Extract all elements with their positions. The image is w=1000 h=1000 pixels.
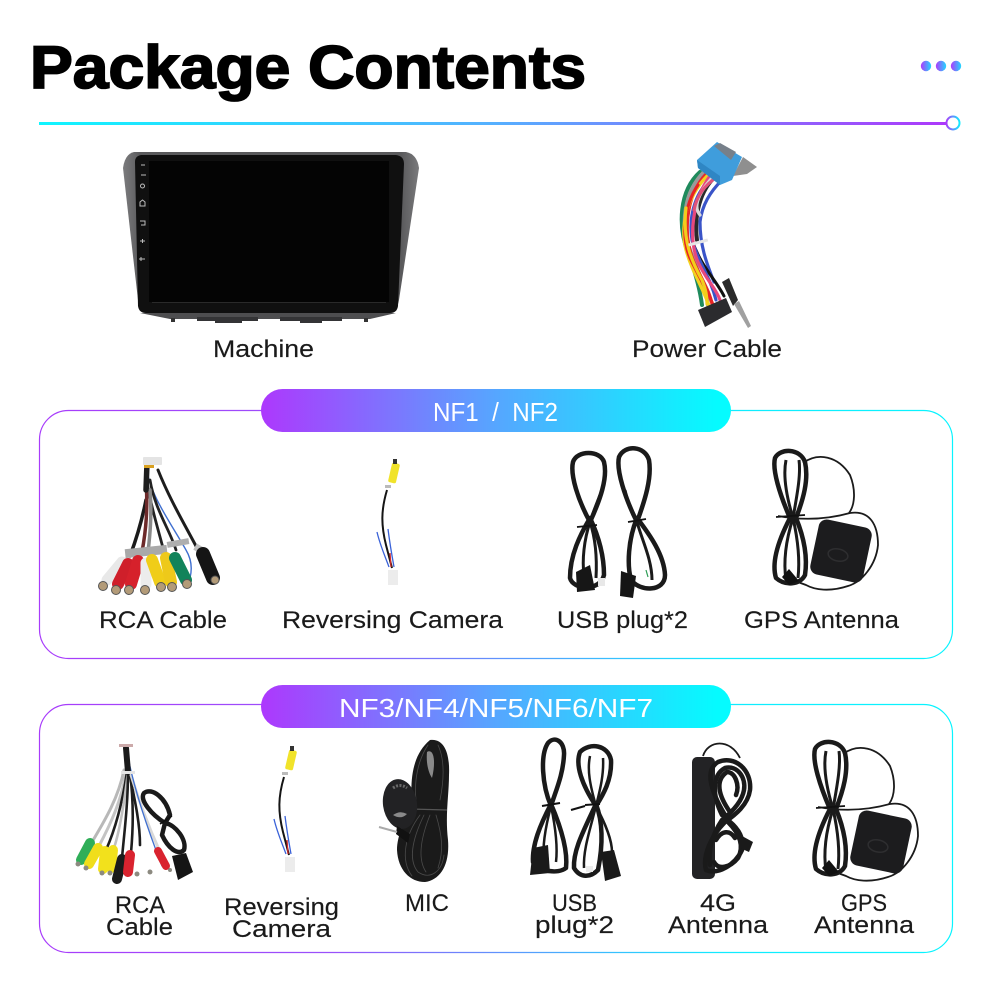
- label: reversing: Reversing: [224, 894, 339, 921]
- label: camera: Camera: [232, 916, 332, 943]
- header divider line: [39, 116, 960, 130]
- product: power cable: [682, 142, 757, 328]
- label: MIC: MIC: [405, 890, 449, 917]
- item: GPS antenna: [774, 451, 878, 590]
- product: machine: [123, 152, 419, 323]
- item: reversing camera cable: [274, 746, 297, 872]
- icon: three dots: [921, 61, 961, 71]
- pill heading: [261, 685, 731, 728]
- pill heading: [261, 389, 731, 432]
- label: RCA cable: RCA: [115, 892, 165, 919]
- label: reversing camera: Reversing Camera: [282, 607, 504, 634]
- label: USB: USB: [552, 890, 597, 917]
- label: GPS antenna: GPS Antenna: [744, 607, 900, 634]
- item: USB plugs: [530, 740, 621, 881]
- item: reversing camera cable: [377, 459, 400, 585]
- panel: NF3/NF4/NF5/NF6/NF7: [40, 685, 952, 952]
- panel: NF1 / NF2: [40, 389, 952, 658]
- label: antenna: Antenna: [814, 912, 915, 939]
- panel border: [40, 410, 952, 658]
- pill heading text: NF1 / NF2: [433, 397, 558, 427]
- item: RCA cable: [76, 744, 193, 880]
- label: antenna: Antenna: [668, 912, 769, 939]
- label: RCA cable line two: Cable: [106, 914, 173, 941]
- label: USB plug*2: USB plug*2: [557, 607, 688, 634]
- label: RCA cable: RCA Cable: [99, 607, 227, 634]
- item: MIC: [379, 740, 449, 882]
- label: power cable: Power Cable: [632, 336, 782, 363]
- item: GPS antenna: [814, 742, 918, 881]
- title: Package Contents: [30, 34, 586, 101]
- label: 4G: 4G: [700, 890, 736, 917]
- item: RCA cable: [98, 457, 219, 594]
- item: 4G antenna: [692, 744, 753, 879]
- pill heading text: NF3/NF4/NF5/NF6/NF7: [339, 693, 653, 723]
- label: plug*2: plug*2: [535, 912, 614, 939]
- panel border: [40, 704, 952, 952]
- item: USB plugs: [570, 448, 665, 598]
- label: GPS: GPS: [841, 890, 887, 917]
- label: machine: Machine: [213, 336, 314, 363]
